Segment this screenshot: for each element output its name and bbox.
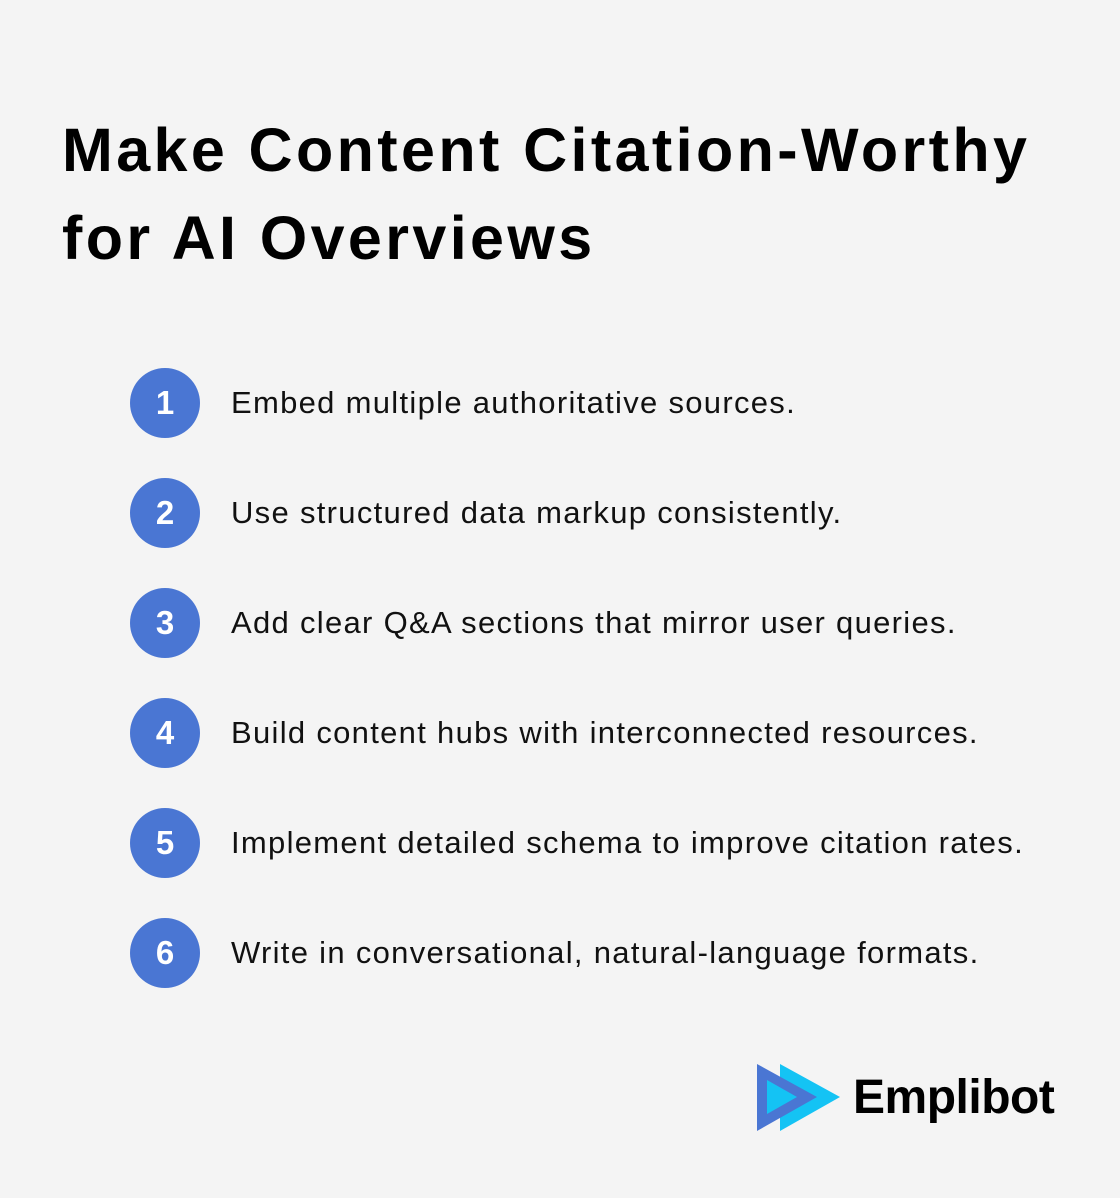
item 6: 6 [156, 934, 174, 971]
item 3: 3 [156, 604, 174, 641]
brand name: Emplibot [853, 1071, 1054, 1124]
item 5: 5 [156, 824, 174, 861]
title: for AI Overviews [62, 204, 596, 272]
item 5: Implement detailed schema to improve citation rates. [231, 825, 1024, 860]
item 2: Use structured data markup consistently. [231, 495, 842, 530]
icon: play triangles [757, 1064, 840, 1131]
item 2: 2 [156, 494, 174, 531]
item 1: 1 [156, 384, 174, 421]
item 4: 4 [156, 714, 174, 751]
item 4 [130, 698, 979, 768]
title: Make Content Citation-Worthy [62, 116, 1030, 184]
item 6 [130, 918, 980, 988]
item 1: Embed multiple authoritative sources. [231, 385, 796, 420]
item 3: Add clear Q&A sections that mirror user queries. [231, 605, 957, 640]
item 2 [130, 478, 842, 548]
logo [757, 1064, 1054, 1131]
item 5 [130, 808, 1024, 878]
item 6: Write in conversational, natural-language formats. [231, 935, 980, 970]
item 1 [130, 368, 796, 438]
item 3 [130, 588, 957, 658]
item 4: Build content hubs with interconnected resources. [231, 715, 979, 750]
title [62, 116, 1030, 272]
